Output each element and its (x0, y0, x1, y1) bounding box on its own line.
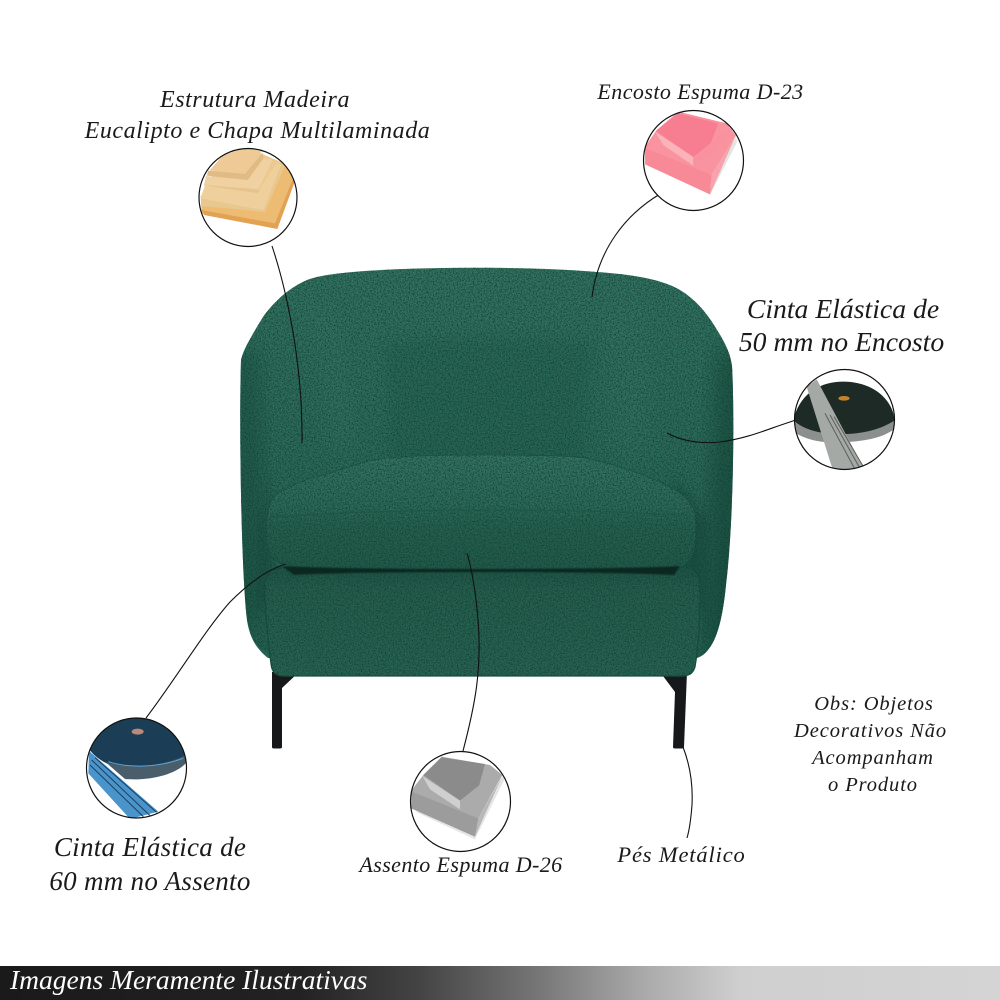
leader: encosto espuma (592, 194, 660, 297)
cushion shadow (282, 566, 680, 575)
label: cinta encosto: Cinta Elástica de (747, 293, 939, 324)
label: estrutura madeira: Eucalipto e Chapa Multilaminada (84, 118, 430, 144)
seat cushion (266, 455, 696, 570)
circle: 60 mm webbing (86, 718, 187, 819)
leader: pés (683, 747, 692, 838)
right leg (660, 672, 687, 748)
circle: 50 mm webbing (793, 370, 895, 472)
label: cinta encosto: 50 mm no Encosto (739, 326, 944, 357)
soft folds and shading on back (232, 290, 745, 650)
label: observação: o Produto (828, 774, 918, 796)
label: cinta assento: 60 mm no Assento (49, 866, 251, 896)
armchair (232, 262, 745, 748)
label: cinta assento: Cinta Elástica de (54, 832, 246, 862)
label: observação: Decorativos Não (793, 720, 947, 742)
left leg (272, 672, 299, 748)
chair back shell (240, 268, 733, 658)
footer text: Imagens Meramente Ilustrativas (9, 964, 367, 995)
leader: assento espuma (463, 553, 479, 751)
label: encosto espuma: Encosto Espuma D-23 (596, 79, 804, 104)
seat base (265, 567, 700, 676)
footer bar (0, 964, 1000, 1000)
leader: estrutura (272, 246, 302, 443)
circle: grey foam (410, 752, 510, 852)
label: estrutura madeira: Estrutura Madeira (159, 87, 350, 113)
circle: plywood (199, 147, 297, 246)
callout leader lines (146, 194, 796, 838)
label: assento espuma: Assento Espuma D-26 (357, 852, 563, 877)
leader: cinta assento (146, 564, 286, 718)
label: pés metálico: Pés Metálico (616, 842, 746, 867)
leader: cinta encosto (667, 420, 796, 443)
cushion seam (272, 510, 692, 517)
label: observação: Acompanham (810, 747, 934, 769)
fabric texture (235, 262, 740, 682)
circle: pink foam (644, 110, 744, 210)
label: observação: Obs: Objetos (814, 693, 934, 715)
